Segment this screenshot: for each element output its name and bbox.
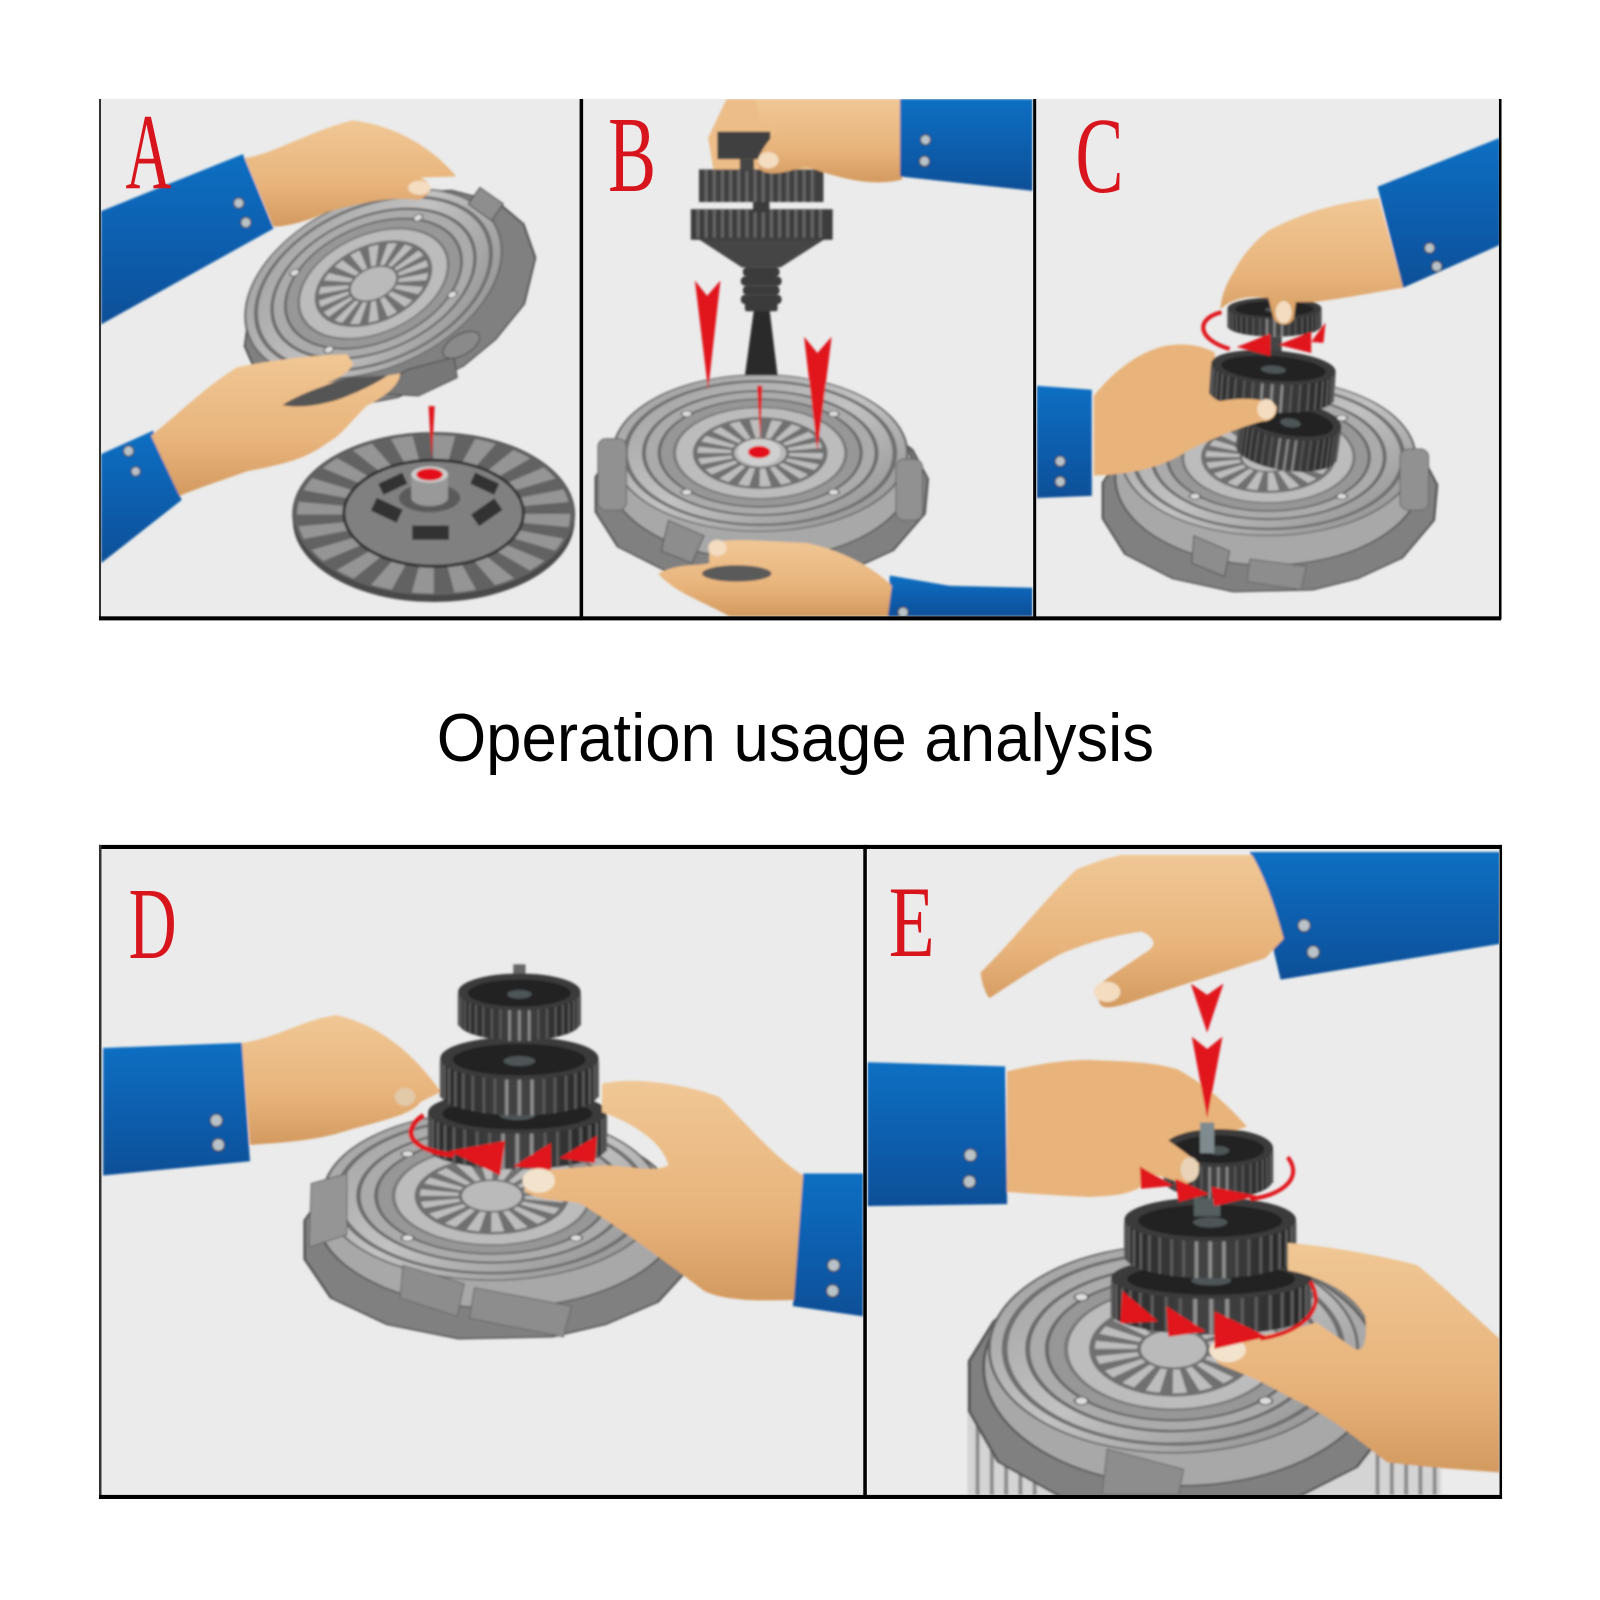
- upper hand, fingers behind gear: [708, 99, 816, 176]
- right hand: [522, 1081, 803, 1300]
- left hand: [1094, 345, 1224, 476]
- panel B background: [584, 99, 1033, 616]
- red rotation arrows: [411, 1115, 597, 1176]
- middle hand back: [1007, 1060, 1247, 1197]
- left hand thumb: [1191, 396, 1278, 449]
- letter A: A: [126, 93, 171, 212]
- panel C background: [1037, 99, 1499, 616]
- panel B illustration: [596, 99, 1033, 617]
- upper hand: [245, 120, 456, 227]
- panel D background: [102, 849, 863, 1495]
- left sleeve with buttons: [103, 1043, 250, 1176]
- panel D illustration: [103, 964, 863, 1339]
- middle hand index finger: [1082, 1094, 1199, 1184]
- red rotation arrows: [1203, 312, 1326, 356]
- panel C: screw gears: [1037, 97, 1500, 616]
- upper sleeve with buttons: [900, 99, 1033, 191]
- gear stack: [428, 964, 607, 1169]
- upper hand: [1220, 198, 1403, 324]
- panel A background: [101, 99, 580, 616]
- upper hand: [981, 855, 1284, 1007]
- panel A: hold clutch cover and disc: [101, 93, 580, 616]
- clutch cover: [305, 1112, 699, 1339]
- left hand: [242, 1015, 441, 1145]
- panel E: tighten upper gear: [867, 849, 1500, 1515]
- lower sleeve: [888, 576, 1033, 617]
- clutch friction disc: [293, 433, 574, 602]
- red rotation arrows, bottom gear: [1120, 1282, 1316, 1349]
- middle sleeve with buttons: [867, 1062, 1007, 1206]
- red insertion arrow and hub marker: [416, 406, 443, 481]
- tool: rod, threads and cone with gears: [691, 132, 833, 376]
- upper sleeve with buttons: [101, 154, 273, 324]
- panel C illustration: [1037, 138, 1500, 592]
- lower hand: [658, 540, 892, 616]
- letter B: B: [608, 96, 656, 215]
- red down arrows: [1191, 984, 1223, 1118]
- frame lines: [99, 99, 1502, 1499]
- upper sleeve with buttons: [1250, 852, 1500, 980]
- gear stack: [1208, 297, 1344, 478]
- letter C: C: [1076, 97, 1123, 216]
- upper sleeve with buttons: [1378, 138, 1500, 288]
- title: Operation usage analysis: [437, 701, 1154, 776]
- gear stack: [1111, 1122, 1311, 1335]
- left sleeve with buttons: [1037, 386, 1092, 498]
- flywheel teeth below clutch: [967, 1367, 1441, 1495]
- letter E: E: [889, 866, 935, 979]
- upper hand with thumb: [755, 99, 902, 182]
- panel A illustration: [101, 120, 574, 602]
- clutch cover: [969, 1245, 1402, 1515]
- right sleeve with buttons: [793, 1173, 863, 1316]
- panel B: insert the tool: [584, 96, 1033, 617]
- panel E illustration: [867, 852, 1500, 1515]
- lower sleeve with buttons: [101, 431, 182, 563]
- red rotation arrows, top gear: [1140, 1157, 1293, 1206]
- red down arrows: [695, 281, 832, 451]
- clutch cover held in hands: [242, 186, 538, 404]
- panel D: tighten lower gear: [102, 849, 863, 1495]
- panel E background: [867, 849, 1499, 1495]
- letter D: D: [129, 868, 177, 981]
- lower hand: [151, 354, 400, 496]
- clutch cover: [596, 375, 928, 583]
- lower hand: [1209, 1243, 1500, 1472]
- clutch cover: [1103, 379, 1437, 592]
